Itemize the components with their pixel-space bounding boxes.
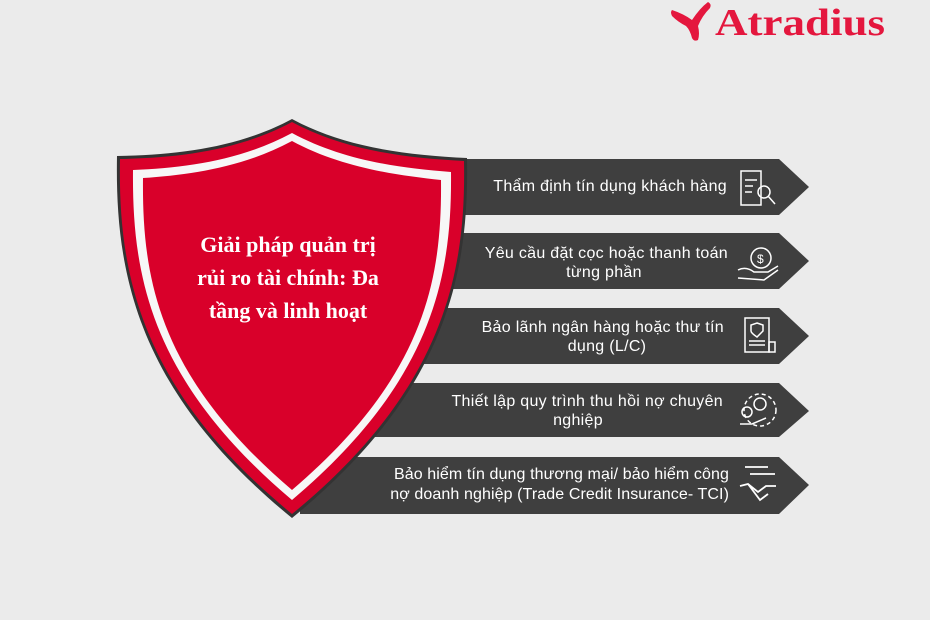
bar 2: từng phần xyxy=(566,264,642,281)
icon: handshake xyxy=(740,467,776,500)
bar 4: nghiệp xyxy=(553,412,603,429)
shield title: Giải pháp quản trị xyxy=(200,232,376,257)
shield title: rủi ro tài chính: Đa xyxy=(197,265,379,290)
bar 5: Bảo hiểm tín dụng thương mại/ bảo hiểm công xyxy=(394,465,729,483)
bar 5: nợ doanh nghiệp (Trade Credit Insurance- TCI) xyxy=(390,486,729,503)
shield title xyxy=(197,232,379,323)
bar 5 xyxy=(300,457,809,514)
bar 1: Thẩm định tín dụng khách hàng xyxy=(493,177,727,195)
bar 3: Bảo lãnh ngân hàng hoặc thư tín xyxy=(482,319,724,336)
icon: debt collection xyxy=(740,394,776,426)
shield title: tầng và linh hoạt xyxy=(209,298,368,323)
icon: document search xyxy=(741,171,775,205)
bar 4: Thiết lập quy trình thu hồi nợ chuyên xyxy=(451,393,723,410)
bar 4 xyxy=(300,383,809,437)
shield xyxy=(117,119,467,518)
bar 3 xyxy=(300,308,809,364)
icon: guarantee document xyxy=(745,318,775,352)
logo: Atradius: Atradius xyxy=(715,2,885,44)
bar 3: dụng (L/C) xyxy=(568,338,646,355)
bar 1 xyxy=(300,159,809,215)
icon: coin in hand xyxy=(738,248,778,280)
logo: Atradius xyxy=(671,2,885,44)
icon: coin in hand: $ xyxy=(757,252,764,266)
bar 2 xyxy=(300,233,809,289)
bar 2: Yêu cầu đặt cọc hoặc thanh toán xyxy=(485,245,728,262)
